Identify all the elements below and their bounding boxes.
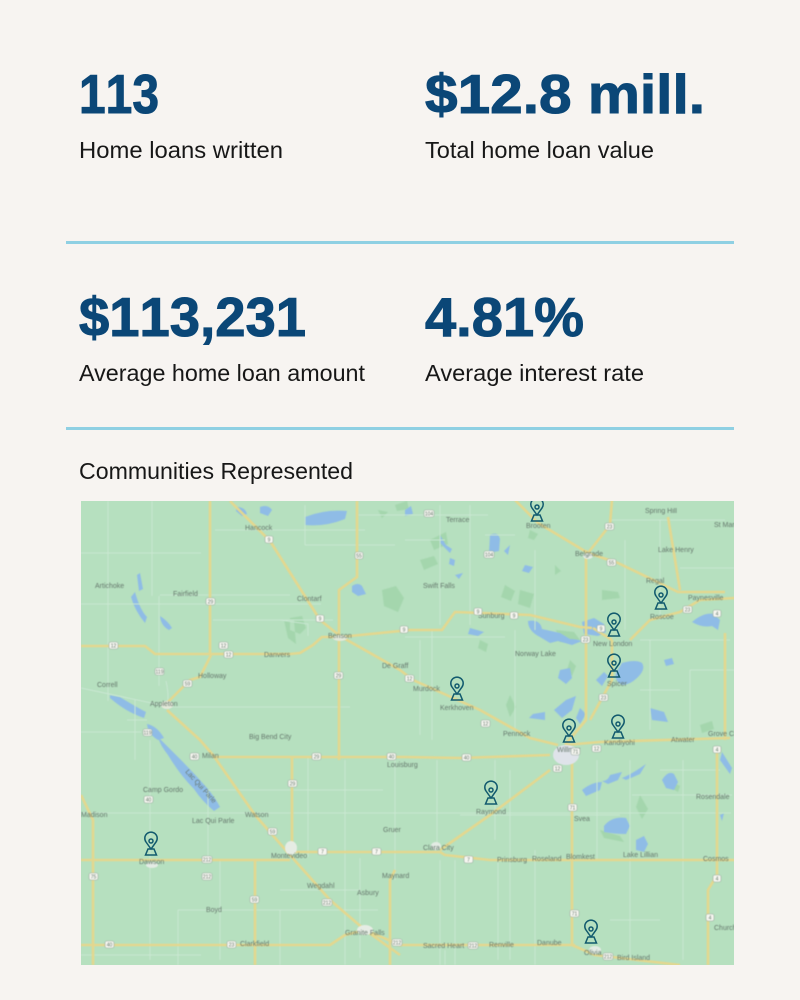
map place names: Appleton: [150, 701, 178, 708]
map route shields: 212: [203, 874, 211, 880]
map route shields: 40: [107, 942, 112, 948]
map route shields: 29: [314, 754, 319, 760]
map place names: Belgrade: [575, 551, 603, 558]
map place names: Roseland: [532, 856, 562, 863]
map place names: Prinsburg: [497, 857, 527, 864]
stat: average interest rate: Average interest rate: [425, 360, 644, 386]
map parks and woodland: [284, 501, 714, 842]
map place names: Spicer: [607, 681, 628, 688]
map place names: Rosendale: [696, 794, 730, 801]
map place names: Spring Hill: [645, 508, 677, 515]
map route shields: 4: [716, 876, 719, 882]
map place names: Bird Island: [617, 955, 650, 962]
map place names: Pennock: [503, 731, 531, 738]
map place names: Camp Gordo: [143, 787, 183, 794]
map place names: Svea: [574, 816, 590, 823]
map route shields: 4: [709, 916, 712, 922]
map place names: Lake Lillian: [623, 852, 658, 859]
map place names: Maynard: [382, 873, 409, 880]
map route shields: 29: [290, 782, 295, 788]
map route shields: 55: [609, 560, 614, 566]
map route shields: 4: [716, 748, 719, 754]
map route shields: 40: [146, 798, 151, 804]
icon: location pin Kandiyohi: [612, 715, 624, 738]
map minor roads: [81, 501, 735, 965]
stat: average interest rate: 4.81%: [425, 286, 584, 348]
map route shields: 212: [393, 940, 401, 946]
map place names: Gruer: [383, 827, 402, 834]
map place names: Sacred Heart: [423, 943, 464, 950]
stat: average interest rate: [425, 286, 644, 386]
stat: average home loan amount: $113,231: [79, 286, 306, 348]
map route shields: 59: [252, 898, 257, 904]
map place names: Blomkest: [566, 854, 595, 861]
map place names: Boyd: [206, 907, 222, 914]
map route shields: 9: [600, 626, 603, 632]
map place names: Hancock: [245, 525, 273, 532]
map place names: Grove City: [708, 731, 742, 738]
map place names: Raymond: [476, 809, 506, 816]
map route shields: 212: [203, 858, 211, 864]
map route shields: 23: [229, 942, 234, 948]
map place names: Montevideo: [271, 853, 307, 860]
map route shields: 40: [192, 754, 197, 760]
map route shields: 29: [208, 600, 213, 606]
map route shields: 40: [389, 754, 394, 760]
map place names: St Martin: [714, 522, 742, 529]
stat: home loans written: 113: [79, 63, 159, 125]
map highways: [81, 500, 735, 965]
map route shields: 12: [555, 766, 560, 772]
map place names: Big Bend City: [249, 734, 292, 741]
map route shields: 55: [356, 554, 362, 560]
map city areas: [146, 553, 601, 954]
map route shields: 4: [716, 612, 719, 618]
map route shields: 12: [483, 722, 488, 728]
map route shields: 59: [270, 830, 275, 836]
map route shields: 9: [513, 614, 516, 620]
map route shields: 7: [321, 850, 324, 856]
map route shields: 7: [375, 850, 378, 856]
map route shields: 29: [336, 674, 341, 680]
map route shields: 23: [685, 608, 690, 614]
map route shields: 104: [425, 512, 433, 518]
map place names: Regal: [646, 578, 665, 585]
icon: location pin Olivia: [585, 920, 597, 943]
map place names: Milan: [202, 753, 219, 760]
map place names: Norway Lake: [515, 651, 556, 658]
map route shields: 119: [144, 730, 152, 736]
map place names: Louisburg: [387, 762, 418, 769]
map route shields: 71: [572, 912, 577, 918]
map place names: Asbury: [357, 890, 379, 897]
stat: total home loan value: [425, 63, 705, 163]
map place names: Watson: [245, 812, 269, 819]
map place names: Granite Falls: [345, 930, 385, 937]
map place names: Correll: [97, 682, 118, 689]
icon: location pin Kerkhoven: [451, 677, 463, 700]
stat: total home loan value: $12.8 mill.: [425, 63, 705, 125]
icon: location pin Willmar: [563, 719, 575, 742]
map route shields: 12: [594, 746, 599, 752]
map route shields: 119: [156, 670, 164, 676]
map place names: Paynesville: [688, 595, 724, 602]
map place names: Madison: [81, 812, 108, 819]
map place names: Olivia: [584, 950, 602, 957]
icon: location pin New London: [608, 613, 620, 636]
map place names: [81, 508, 742, 962]
stat: total home loan value: Total home loan value: [425, 137, 654, 163]
map place names: Lac Qui Parle: [184, 769, 217, 805]
map place names: Lac Qui Parle: [192, 818, 235, 825]
map place names: Sunburg: [478, 613, 505, 620]
map place names: Cosmos: [703, 856, 729, 863]
map route shields: 9: [268, 538, 271, 544]
map route shields: 212: [469, 944, 477, 950]
map place names: Church: [714, 925, 737, 932]
map place names: Benson: [328, 633, 352, 640]
map place names: De Graff: [382, 663, 408, 670]
map place names: Kandiyohi: [604, 740, 635, 747]
map route shields: 75: [91, 874, 96, 880]
map route shields: 12: [111, 644, 116, 650]
icon: location pin Raymond: [485, 781, 497, 804]
icon: location pin Paynesville: [655, 586, 667, 609]
map place names: Brooten: [526, 523, 551, 530]
map place names: Renville: [489, 942, 514, 949]
map place names: Roscoe: [650, 614, 674, 621]
icon: location pin Spicer: [608, 654, 620, 677]
map route shields: 212: [323, 900, 331, 906]
icon: location pin Brooten: [531, 498, 543, 521]
map place names: Murdock: [413, 686, 440, 693]
icon: location pin Dawson: [145, 832, 157, 855]
map route shields: 23: [583, 638, 588, 644]
map route shields: 212: [604, 954, 612, 960]
map place names: Dawson: [139, 859, 164, 866]
map route shields: 23: [607, 524, 612, 530]
map place names: Artichoke: [95, 583, 124, 590]
map place names: Clontarf: [297, 596, 322, 603]
map route shields: 9: [319, 616, 322, 622]
stat: average home loan amount: Average home loan amount: [79, 360, 366, 386]
map place names: Swift Falls: [423, 583, 455, 590]
map route shields: 71: [570, 806, 575, 812]
map place names: Clara City: [423, 845, 454, 852]
map place names: Terrace: [446, 517, 469, 524]
map route shields: 12: [407, 676, 412, 682]
map route shields: 40: [464, 756, 469, 762]
map route shields: 12: [221, 644, 226, 650]
map of communities: [81, 498, 742, 965]
map route shields: 23: [601, 696, 606, 702]
map place names: Kerkhoven: [440, 705, 474, 712]
stat: home loans written: Home loans written: [79, 137, 283, 163]
stat: average home loan amount: [79, 286, 366, 386]
map place names: Fairfield: [173, 591, 198, 598]
map route shields: 9: [477, 610, 480, 616]
stat: home loans written: [79, 63, 283, 163]
map route shields: 7: [467, 858, 470, 864]
map place names: Atwater: [671, 737, 695, 744]
map route shields: [89, 510, 721, 960]
map place names: Holloway: [198, 673, 227, 680]
map route shields: 12: [226, 652, 231, 658]
map place names: Danvers: [264, 652, 291, 659]
map place names: Lake Henry: [658, 547, 694, 554]
map route shields: 59: [185, 682, 190, 688]
map place names: Wegdahl: [307, 883, 335, 890]
map place names: New London: [593, 641, 632, 648]
map place names: Clarkfield: [240, 941, 269, 948]
map route shields: 104: [485, 552, 493, 558]
map route shields: 71: [573, 750, 578, 756]
map lakes: [110, 506, 732, 852]
map place names: Willmar: [557, 747, 581, 754]
heading: communities represented: Communities Represented: [79, 458, 353, 484]
map route shields: 9: [403, 628, 406, 634]
map place names: Danube: [537, 940, 562, 947]
